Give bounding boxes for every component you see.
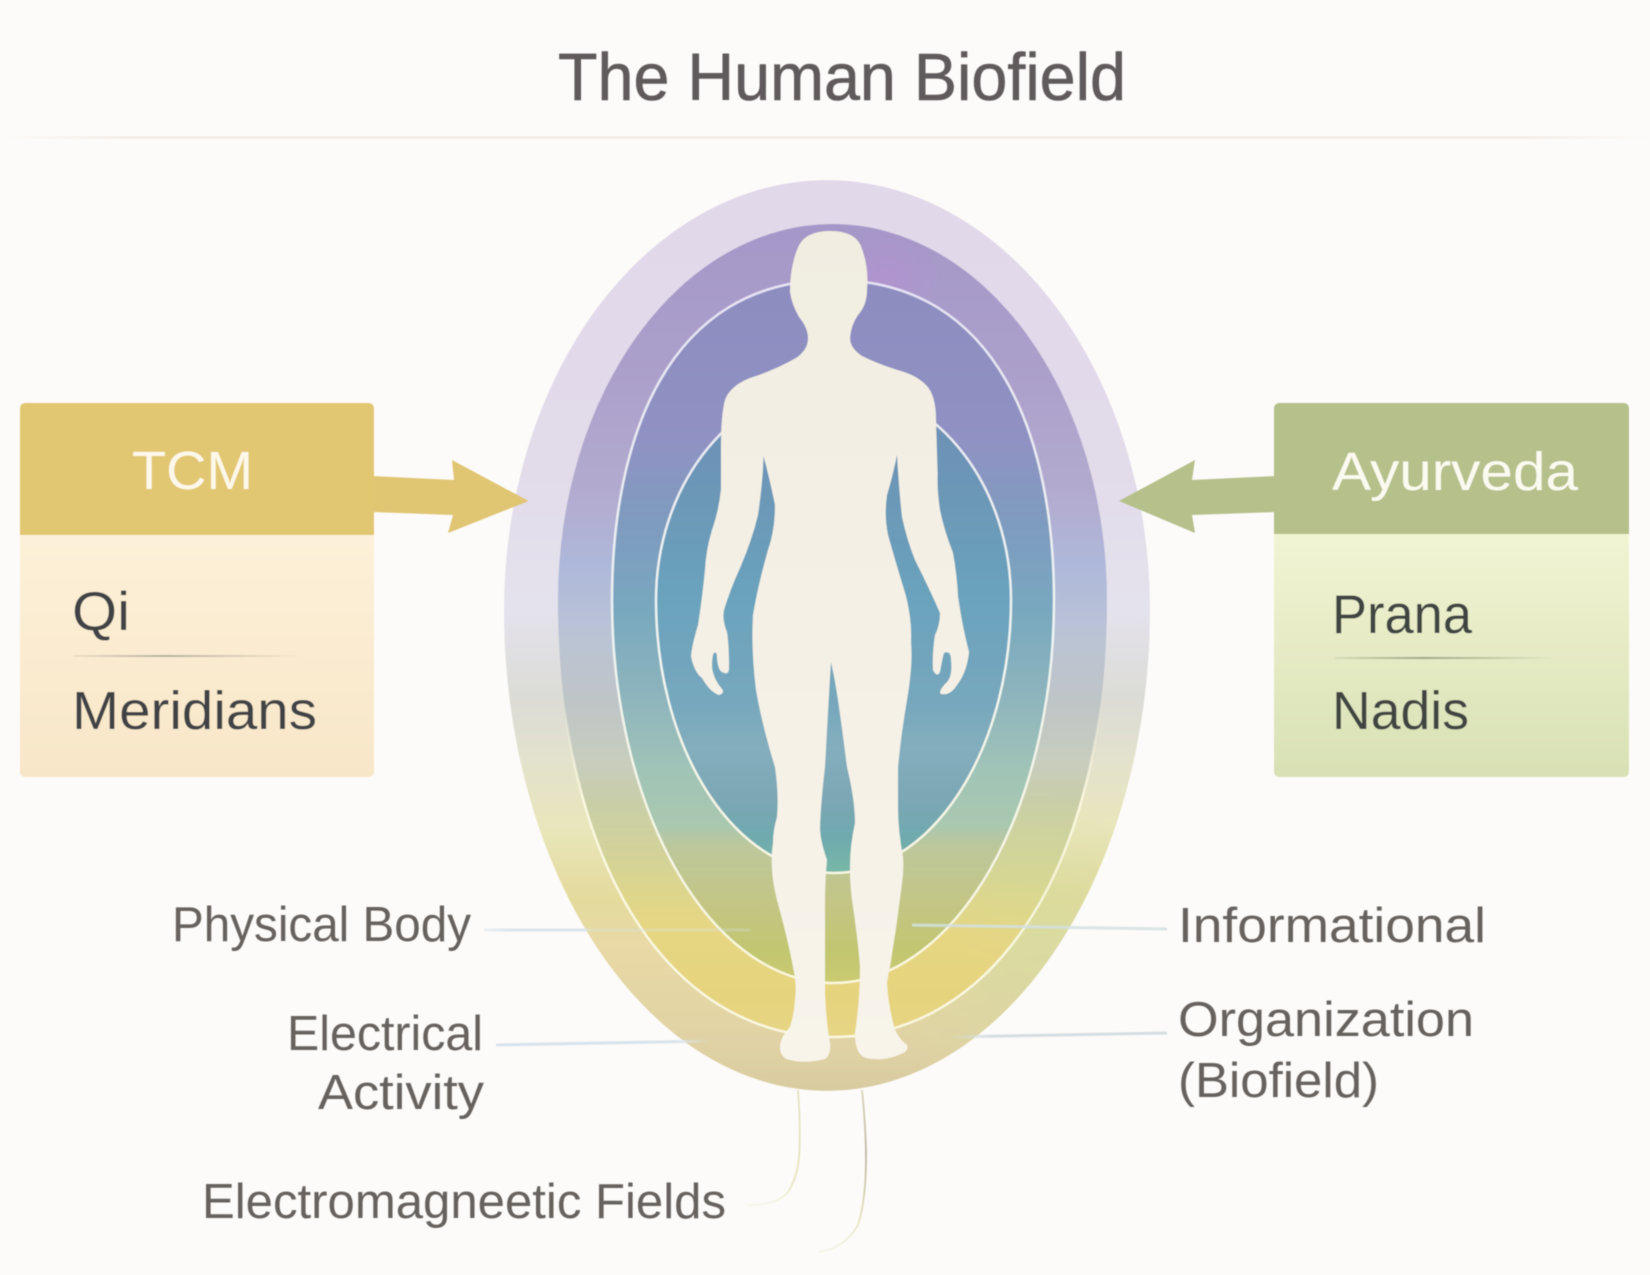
label: Electromagneetic Fields: Electromagneetic Fields [202,1175,726,1229]
Nadis text: Nadis [1332,681,1469,741]
green tint on lower right of outer layer [982,888,1084,1003]
Meridians text: Meridians [72,681,317,741]
TCM heading: TCM [132,441,253,501]
electromagnetic field wisps [748,1090,866,1252]
Ayurveda panel body [1274,530,1629,777]
field layer: second band [558,224,1107,1037]
leader lines [484,925,1167,1045]
panel: Ayurveda [1119,403,1629,777]
field layer: ring B [656,385,1011,873]
TCM panel header [20,403,374,535]
Ayurveda panel header [1274,403,1629,534]
Prana text: Prana [1332,583,1472,645]
field layer: ring A [612,280,1054,983]
highlight above shoulder [874,272,896,286]
field layer: outer egg [504,180,1150,1091]
label: Electrical Activity: Activity [318,1066,485,1120]
label: Electrical Activity [287,1007,485,1120]
Ayurveda heading: Ayurveda [1332,442,1579,502]
label: Informational: Informational [1178,899,1486,953]
Ayurveda arrow [1119,460,1276,533]
label: Physical Body: Physical Body [172,898,471,952]
title: The Human Biofield [558,40,1126,115]
human silhouette [691,231,969,1062]
TCM panel body [20,530,374,777]
label: Organization (Biofield) [1178,993,1474,1108]
label: Electrical Activity: Electrical [287,1007,483,1061]
label: Organization (Biofield): (Biofield) [1178,1054,1379,1108]
label: Organization (Biofield): Organization [1178,993,1474,1047]
green tint on lower right of second band [1026,846,1066,924]
biofield diagram [504,180,1210,1100]
TCM arrow [372,460,529,533]
Qi text: Qi [72,580,130,642]
panel: TCM [20,403,529,777]
